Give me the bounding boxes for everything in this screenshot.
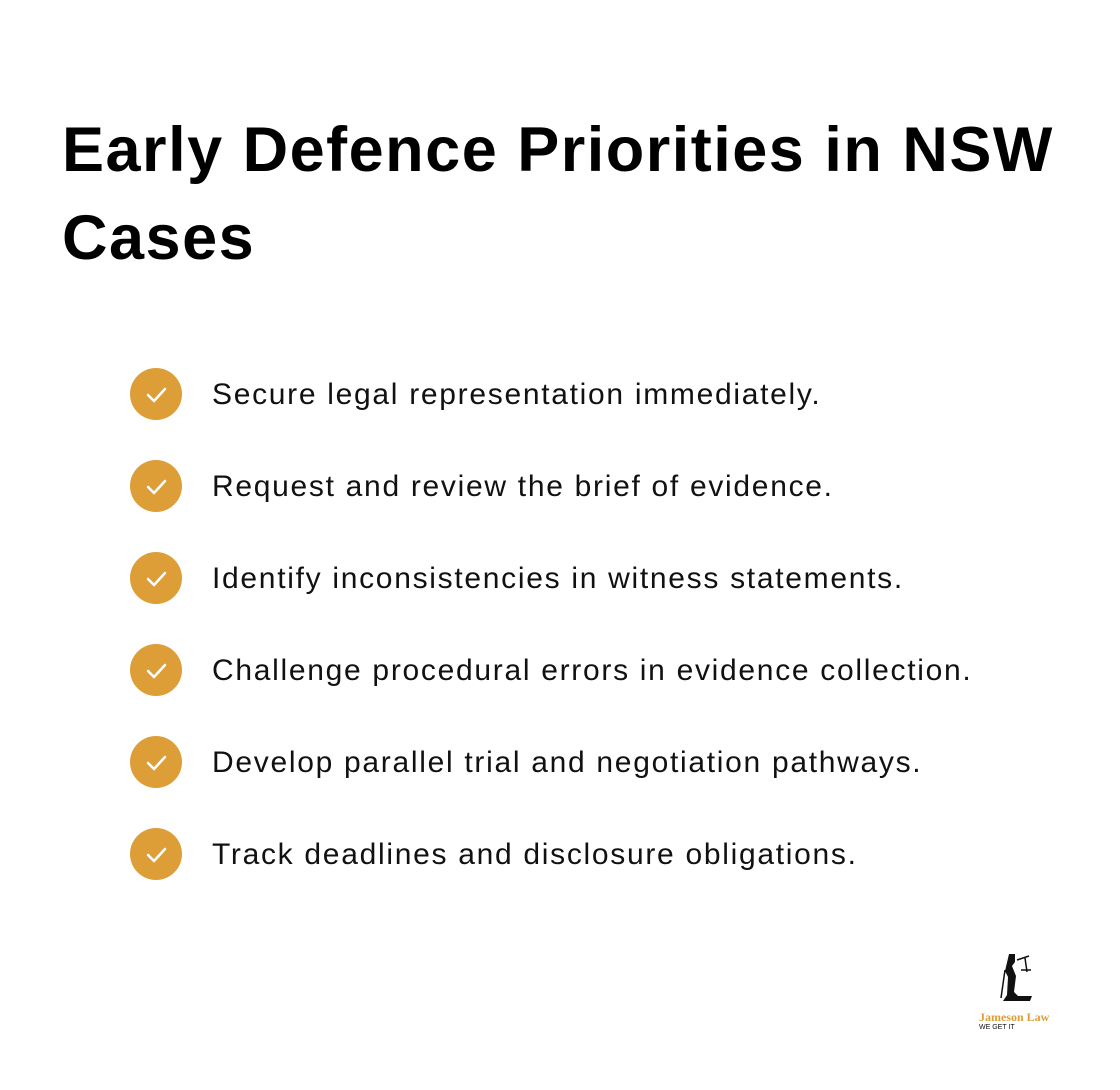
item 6: Track deadlines and disclosure obligations. bbox=[212, 838, 858, 871]
item 2 bbox=[130, 460, 834, 512]
icon: check bbox=[130, 736, 182, 788]
icon: check bbox=[130, 368, 182, 420]
item 3 bbox=[130, 552, 904, 604]
item 1 bbox=[130, 368, 821, 420]
item 4 bbox=[130, 644, 972, 696]
item 3: Identify inconsistencies in witness statements. bbox=[212, 562, 904, 595]
item 5: Develop parallel trial and negotiation pathways. bbox=[212, 746, 922, 779]
icon: check bbox=[130, 644, 182, 696]
icon: check bbox=[130, 460, 182, 512]
logo bbox=[979, 954, 1050, 1031]
item 6 bbox=[130, 828, 858, 880]
icon: check bbox=[130, 828, 182, 880]
logo: WE GET IT bbox=[979, 1024, 1015, 1031]
logo: Jameson Law bbox=[979, 1010, 1049, 1024]
title: Early Defence Priorities in NSW Cases bbox=[62, 115, 1054, 273]
icon: check bbox=[130, 552, 182, 604]
item 2: Request and review the brief of evidence. bbox=[212, 470, 834, 503]
item 1: Secure legal representation immediately. bbox=[212, 378, 821, 411]
item 5 bbox=[130, 736, 922, 788]
item 4: Challenge procedural errors in evidence collection. bbox=[212, 654, 972, 687]
